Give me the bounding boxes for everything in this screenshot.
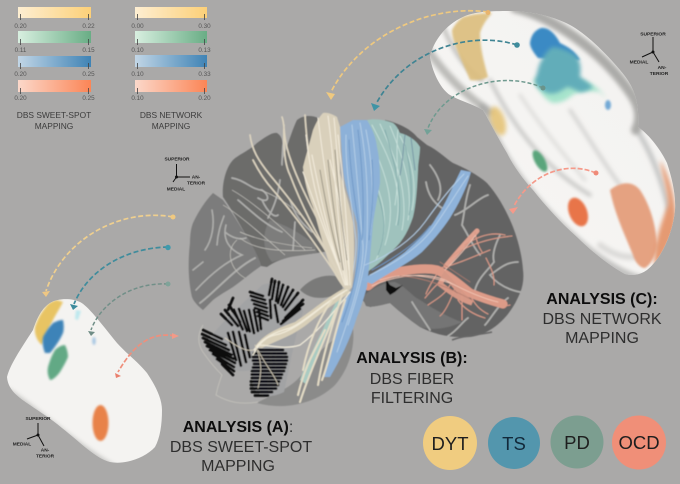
OCD spot	[566, 196, 590, 228]
TS blob small	[605, 100, 611, 110]
arrow: DYT network to fibers	[326, 10, 490, 100]
small TS spots	[75, 310, 81, 320]
axis icon: surface A orientation: MEDIAL	[13, 442, 31, 448]
heading: analysis B: FILTERING	[371, 390, 453, 407]
fiber bundle: PD (light teal)	[300, 119, 420, 384]
posterior lobe folia	[202, 330, 250, 375]
colorbar: PD sweet-spot	[15, 31, 95, 54]
axis icon: surface A orientation: AN-	[41, 448, 50, 454]
surface base	[430, 11, 675, 275]
colorbar: TS sweet-spot: 0.25	[82, 71, 95, 78]
colorbar: DYT network: 0.00	[131, 23, 144, 30]
arrow: TS to sweet-spot	[70, 245, 171, 310]
arrow: OCD to sweet-spot	[115, 333, 179, 378]
colorbar: PD network	[131, 31, 211, 54]
heading: analysis C: DBS NETWORK	[542, 311, 662, 328]
legend: DBS network mapping	[131, 7, 211, 131]
surface shading	[10, 388, 112, 462]
colorbar: DYT sweet-spot: 0.22	[82, 23, 95, 30]
surface shading	[428, 8, 670, 280]
heading: analysis C: MAPPING	[565, 330, 639, 347]
PD blob	[48, 345, 68, 380]
legend title: network: MAPPING	[152, 121, 190, 131]
cerebellum white matter	[208, 283, 303, 396]
legend: DBS sweet-spot mapping	[14, 7, 95, 131]
brainstem	[257, 328, 353, 406]
DYT blob small	[487, 105, 509, 137]
lower frontal sliver	[452, 332, 492, 340]
OCD spot	[92, 405, 108, 441]
DYT blob large	[452, 13, 492, 80]
TS badge	[488, 417, 540, 469]
heading: analysis A: :	[289, 419, 293, 436]
brain surface: network mapping (C)	[428, 8, 676, 280]
upper-left lobe folia	[221, 298, 261, 333]
arrow: TS network to fibers	[371, 40, 520, 111]
arrow: PD network to fibers	[424, 81, 546, 135]
inferior lobe folia	[251, 350, 287, 396]
PD badge	[550, 416, 604, 468]
black midbrain voids	[386, 279, 403, 295]
axis icon: surface C orientation: AN-	[658, 65, 667, 71]
arrow: OCD network to fibers	[509, 168, 598, 214]
TS blob teal	[535, 47, 593, 94]
colorbar: TS sweet-spot	[14, 56, 95, 78]
colorbar: TS network	[131, 55, 211, 78]
DYT blob	[35, 300, 63, 345]
axis icon: surface A orientation: SUPERIOR	[25, 416, 51, 422]
axis icon: centre brain orientation	[164, 156, 206, 192]
colorbar: OCD sweet-spot: 0.20	[14, 95, 27, 102]
colorbar: TS sweet-spot: 0.20	[14, 71, 27, 78]
legend title: sweet-spot: MAPPING	[35, 121, 73, 131]
colorbar: OCD sweet-spot: 0.25	[82, 95, 95, 102]
fiber bundle: TS (blue)	[323, 120, 471, 377]
colorbar: OCD network	[131, 80, 211, 102]
colorbar: TS network: 0.10	[131, 71, 144, 78]
fiber bundle: OCD (salmon)	[368, 231, 512, 320]
axis icon: surface A orientation: TERIOR	[36, 454, 55, 460]
colorbar: DYT network: 0.30	[198, 23, 211, 30]
axis icon: surface C orientation: MEDIAL	[630, 60, 648, 66]
TS blob blue	[530, 28, 580, 60]
colorbar: OCD sweet-spot	[14, 80, 95, 102]
PD network blob	[533, 76, 606, 103]
axis icon: centre brain orientation: SUPERIOR	[164, 156, 190, 162]
brain sagittal slice	[189, 113, 523, 406]
arrow: PD to sweet-spot	[88, 282, 170, 336]
DYT badge	[423, 416, 477, 470]
TS badge: TS	[502, 433, 526, 454]
axis icon: surface C orientation: SUPERIOR	[640, 32, 666, 38]
colorbar: OCD network: 0.10	[131, 95, 144, 102]
cerebellum outline fibres	[199, 325, 258, 403]
axis icon: surface C orientation	[630, 32, 669, 77]
arrow: DYT to sweet-spot	[42, 214, 176, 297]
colorbar: PD sweet-spot: 0.15	[82, 47, 95, 54]
axis icon: surface A orientation	[13, 416, 55, 460]
heading: analysis B: DBS FIBER	[370, 371, 454, 388]
colorbar: OCD network: 0.20	[198, 95, 211, 102]
DYT badge: DYT	[432, 433, 468, 454]
heading: analysis C: ANALYSIS (C):	[546, 291, 658, 308]
colorbar: DYT sweet-spot	[14, 7, 95, 30]
heading: analysis A: MAPPING	[201, 458, 275, 475]
occipital lobe	[189, 193, 261, 310]
OCD badge	[612, 416, 666, 470]
fiber bundle: DYT (cream)	[225, 113, 354, 402]
PD spot	[531, 149, 549, 174]
OCD badge: OCD	[618, 432, 660, 453]
disease key	[423, 416, 666, 470]
parietal lighter gyrus	[264, 220, 317, 262]
sulci	[193, 145, 520, 336]
axis icon: centre brain orientation: AN-	[192, 174, 201, 180]
OCD edge blob	[654, 160, 676, 268]
heading: analysis A: ANALYSIS (A)	[183, 419, 289, 436]
colorbar: PD network: 0.13	[198, 47, 211, 54]
axis icon: centre brain orientation: MEDIAL	[167, 186, 185, 192]
legend title: sweet-spot: DBS SWEET-SPOT	[17, 110, 91, 120]
colorbar: PD network: 0.10	[131, 47, 144, 54]
colorbar: DYT network	[131, 7, 211, 30]
thin cortical fibres	[223, 190, 315, 278]
upper lobe folia	[250, 279, 303, 324]
axis icon: centre brain orientation: TERIOR	[187, 180, 206, 186]
surface base	[7, 299, 162, 463]
ventral midbrain region	[362, 282, 462, 329]
heading: analysis B: ANALYSIS (B):	[356, 350, 468, 367]
colorbar: PD sweet-spot: 0.11	[15, 47, 27, 54]
frontal lobe	[360, 120, 523, 337]
axis icon: surface C orientation: TERIOR	[650, 71, 669, 77]
thalamic grey patch	[300, 276, 342, 298]
colorbar: TS network: 0.33	[198, 71, 211, 78]
colorbar: DYT sweet-spot: 0.20	[14, 23, 27, 30]
cerebellum folia	[202, 279, 303, 396]
brain surface: sweet-spot mapping (A)	[5, 299, 162, 470]
TS blob	[43, 320, 64, 353]
PD badge: PD	[564, 432, 590, 453]
legend title: network: DBS NETWORK	[140, 110, 203, 120]
OCD blob large	[610, 183, 657, 268]
parietal lobe	[223, 116, 335, 267]
heading: analysis A: DBS SWEET-SPOT	[170, 439, 312, 456]
